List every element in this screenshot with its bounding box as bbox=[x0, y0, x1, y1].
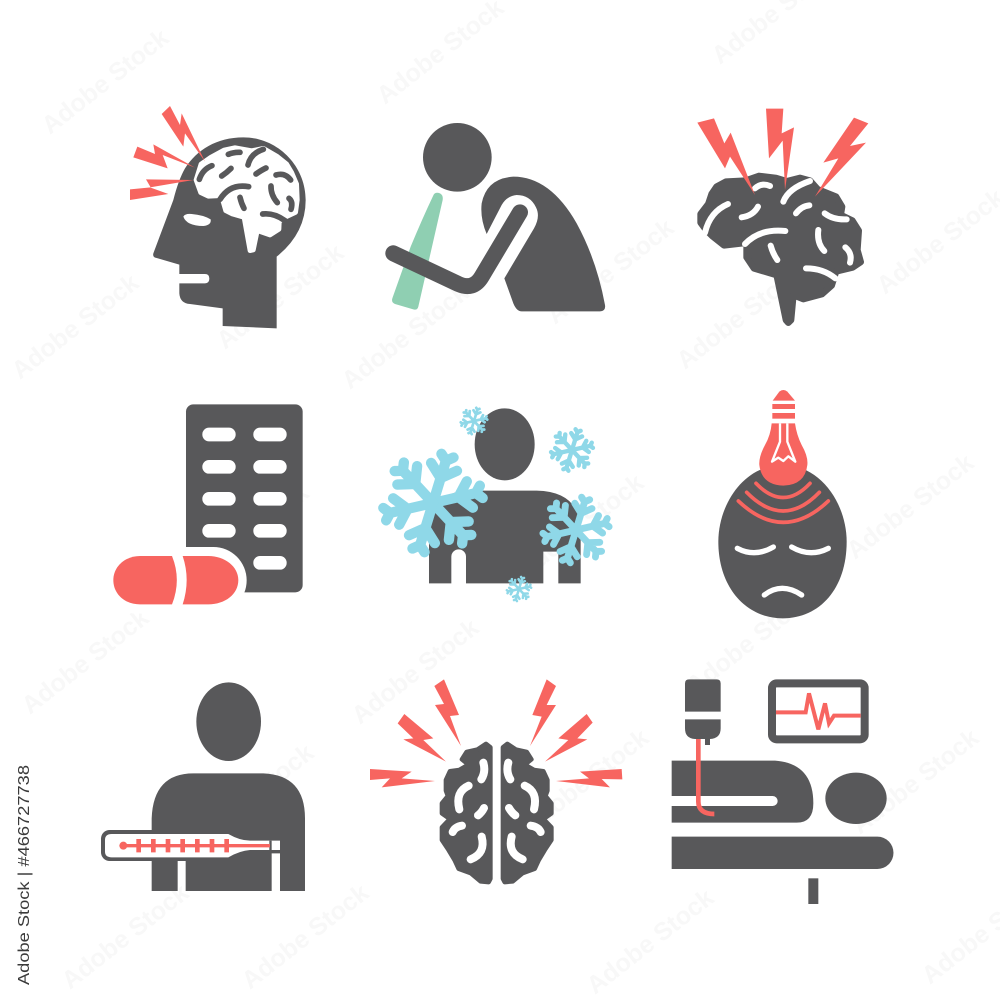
icon: blister pack and capsule bbox=[103, 404, 303, 614]
brain right half bbox=[503, 744, 551, 882]
head bbox=[196, 682, 261, 761]
icon: patient in hospital bed bbox=[672, 679, 893, 904]
watermark pattern: Adobe Stock bbox=[56, 879, 194, 995]
watermark pattern: Adobe Stock bbox=[176, 479, 314, 595]
icon: person with thermometer bbox=[101, 682, 305, 891]
brain bbox=[196, 148, 297, 251]
arm bbox=[393, 212, 520, 286]
icon: person with bottle bbox=[392, 123, 605, 311]
watermark pattern: Adobe Stock bbox=[516, 724, 654, 840]
icon: face with light bulb bbox=[718, 390, 847, 618]
eyes and mouth bbox=[737, 547, 828, 595]
head silhouette bbox=[153, 137, 306, 328]
body bbox=[481, 177, 605, 311]
mercury scale bbox=[123, 839, 270, 852]
bottle bbox=[392, 193, 443, 310]
watermark pattern: Adobe Stock bbox=[511, 469, 649, 585]
body bbox=[152, 773, 305, 891]
watermark pattern: Adobe Stock bbox=[681, 584, 819, 700]
patient head bbox=[825, 773, 887, 824]
person bbox=[429, 408, 581, 583]
head bbox=[423, 123, 492, 192]
watermark pattern: Adobe Stock bbox=[581, 884, 719, 1000]
thermometer bbox=[101, 830, 280, 861]
brain left half bbox=[442, 744, 490, 882]
stock id text: Adobe Stock | #466727738 bbox=[16, 765, 33, 985]
blister pack bbox=[186, 404, 303, 592]
lightning bolts bbox=[370, 679, 622, 787]
icon: top view brain with lightning bbox=[370, 679, 622, 882]
watermark pattern: Adobe Stock bbox=[846, 724, 984, 840]
icon: head with brain and lightning bbox=[130, 106, 306, 328]
watermark pattern: Adobe Stock bbox=[6, 269, 144, 385]
watermark pattern: Adobe Stock bbox=[541, 214, 679, 330]
brain folds bbox=[705, 181, 851, 278]
filament bbox=[772, 423, 795, 462]
watermark pattern: Adobe Stock bbox=[236, 879, 374, 995]
brain folds bbox=[453, 763, 541, 859]
brain bbox=[701, 176, 861, 323]
bulb screw cap bbox=[772, 390, 795, 419]
watermark pattern: Adobe Stock bbox=[211, 239, 349, 355]
brain folds bbox=[199, 149, 292, 221]
watermark pattern: Adobe Stock bbox=[36, 24, 174, 140]
watermark pattern: Adobe Stock bbox=[346, 614, 484, 730]
eye bbox=[183, 214, 211, 226]
watermark pattern: Adobe Stock bbox=[181, 739, 319, 855]
bulb bbox=[759, 423, 807, 486]
icon: brain with three lightning bolts bbox=[697, 109, 868, 323]
bed leg bbox=[808, 878, 818, 904]
tablets bbox=[103, 428, 287, 614]
pain waves bbox=[738, 483, 828, 522]
bed bbox=[672, 837, 893, 869]
icon: cold person with snowflakes bbox=[371, 405, 617, 604]
iv bag bbox=[685, 679, 721, 745]
watermark pattern: Adobe Stock bbox=[841, 449, 979, 565]
patient body bbox=[672, 761, 813, 823]
capsule bbox=[113, 556, 238, 604]
face bbox=[718, 465, 847, 618]
watermark pattern: Adobe Stock bbox=[16, 604, 154, 720]
monitor bbox=[772, 683, 865, 739]
watermark pattern: Adobe Stock bbox=[336, 279, 474, 395]
watermark pattern: Adobe Stock bbox=[671, 259, 809, 375]
snowflakes bbox=[371, 441, 495, 565]
iv tube bbox=[698, 739, 714, 814]
lightning bolts bbox=[130, 106, 205, 200]
lightning bolts bbox=[697, 109, 868, 197]
